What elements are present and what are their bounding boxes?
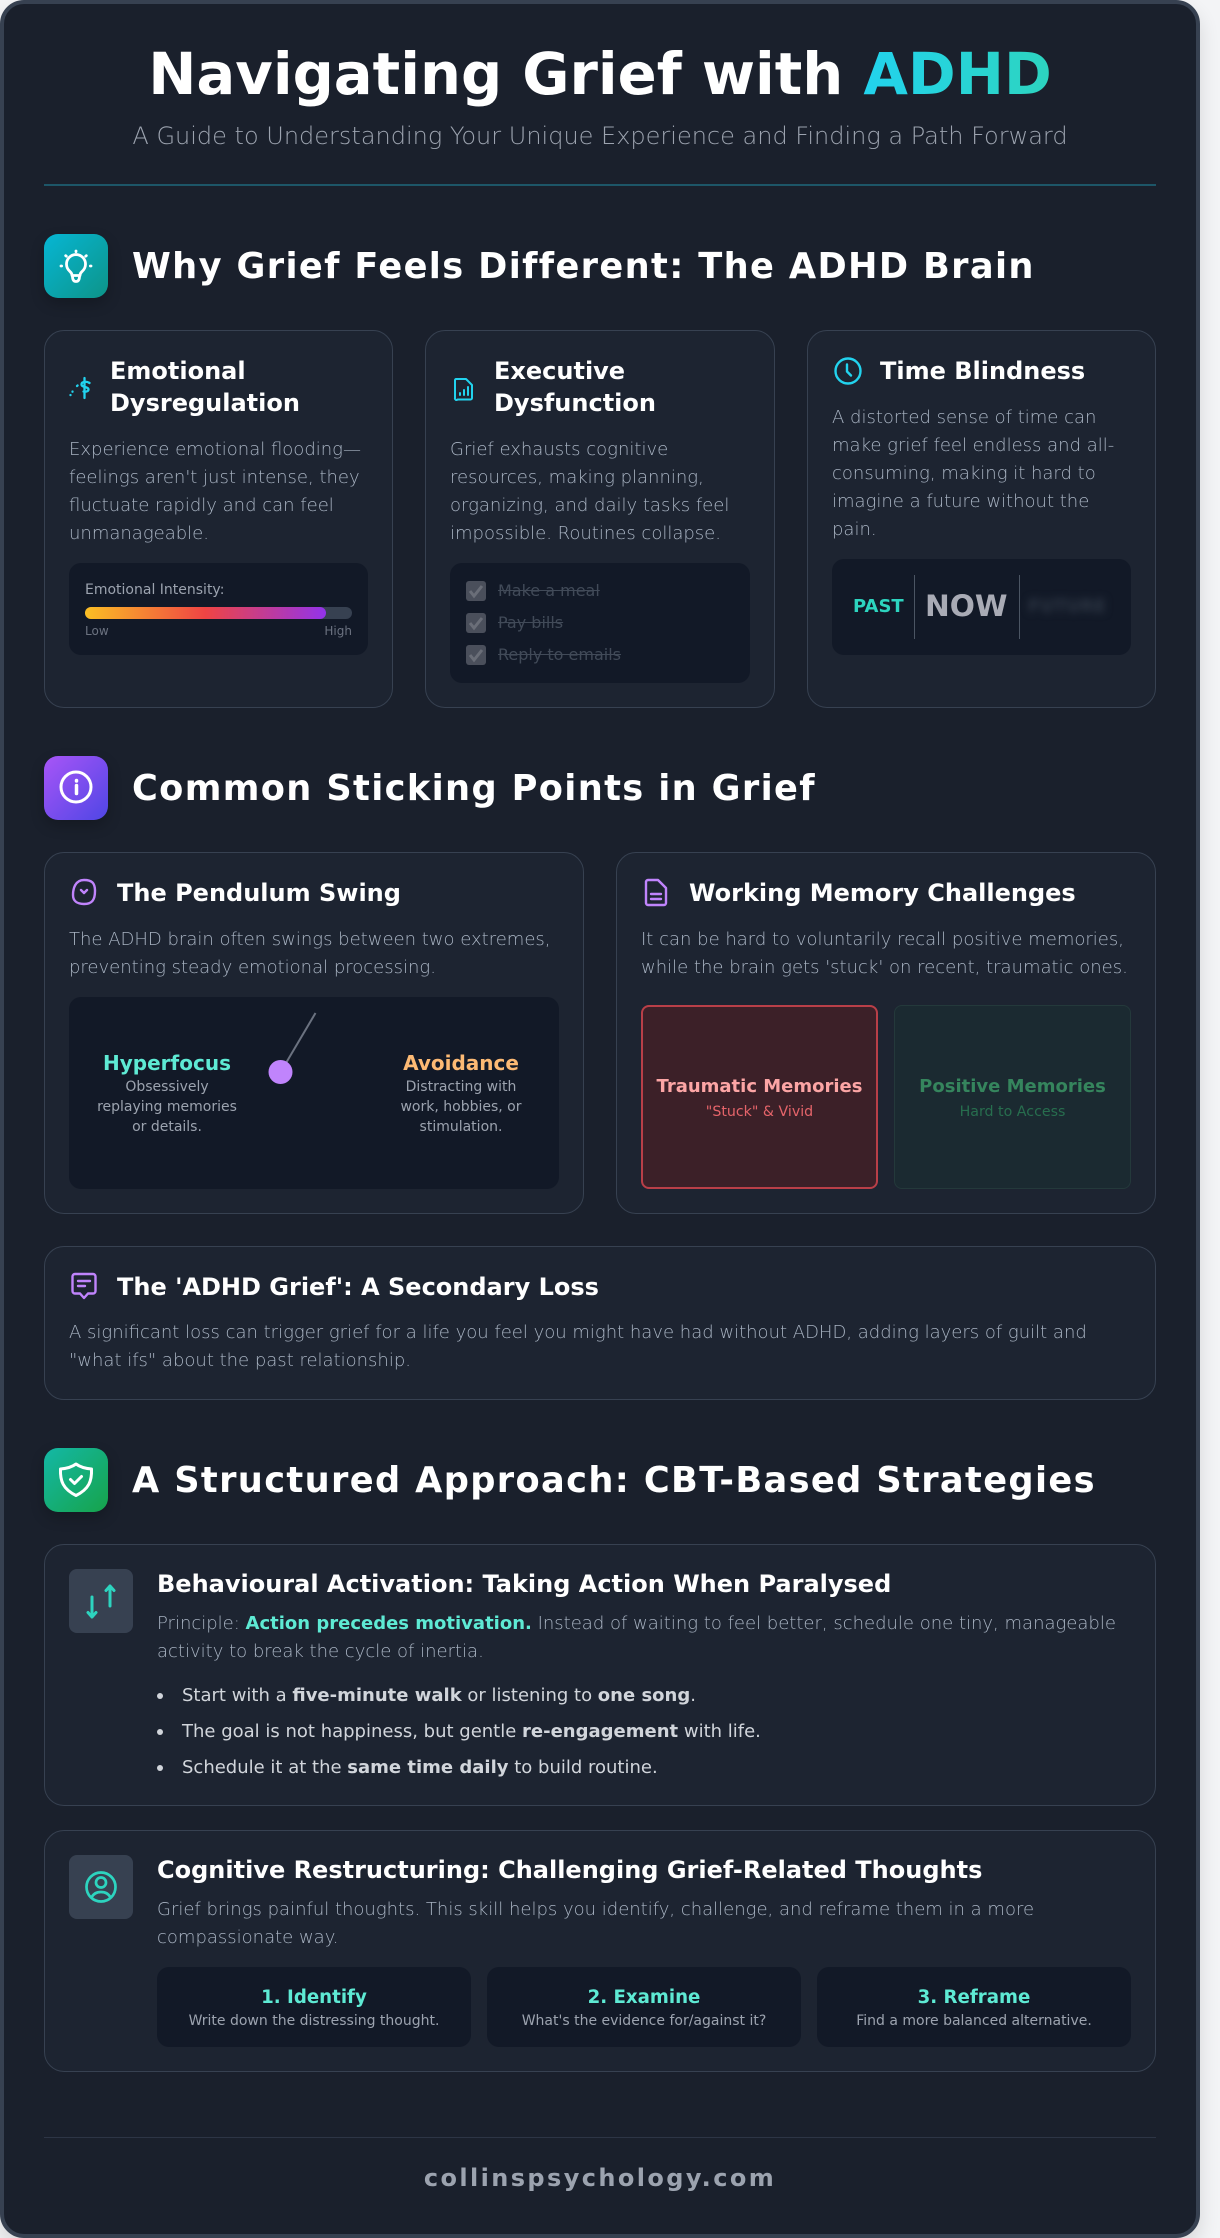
section icon: lightbulb — [44, 234, 108, 298]
card text — [69, 438, 361, 544]
card text: Experience emotional flooding— — [69, 438, 361, 460]
step text: Write down the distressing thought. — [189, 2013, 439, 2029]
section heading: sticking points: Common Sticking Points in Grief — [132, 768, 816, 809]
positive sub: Hard to Access — [960, 1104, 1065, 1120]
bullet 3 — [157, 1765, 163, 1771]
divider — [1019, 575, 1020, 639]
item 1: Start with a five-minute walk or listening to one song. — [182, 1685, 696, 1706]
panel: behavioural activation — [44, 1544, 1156, 1806]
icon: message — [71, 1272, 97, 1300]
checkbox 1 — [466, 581, 486, 601]
task 3: Reply to emails — [498, 645, 621, 664]
traumatic title: Traumatic Memories — [657, 1076, 862, 1097]
avoidance text: Distracting with — [406, 1079, 516, 1095]
card text — [450, 438, 729, 544]
step text: What's the evidence for/against it? — [522, 2013, 766, 2029]
icon: document — [644, 878, 668, 906]
card text: imagine a future without the — [832, 490, 1089, 512]
card text — [69, 1322, 1087, 1371]
step 1 — [157, 1967, 471, 2047]
now: NOW — [925, 589, 1008, 623]
card heading — [494, 357, 656, 417]
panel: pendulum swing — [44, 852, 584, 1214]
card text: pain. — [832, 518, 877, 540]
past: PAST — [853, 596, 904, 617]
card text: A significant loss can trigger grief for a life you feel you might have had without ADHD, adding layers of guilt and — [69, 1322, 1087, 1343]
step title: 1. Identify — [261, 1987, 367, 2008]
card heading: Emotional — [110, 357, 246, 385]
card text: activity to break the cycle of inertia. — [157, 1640, 484, 1662]
card text: Grief exhausts cognitive — [450, 438, 668, 460]
card heading: Working Memory Challenges — [689, 879, 1076, 907]
task 1: Make a meal — [498, 581, 600, 600]
card text: make grief feel endless and all- — [832, 434, 1114, 456]
panel: ADHD grief — [44, 1246, 1156, 1400]
step 3 — [817, 1967, 1131, 2047]
checkbox 3 — [466, 645, 486, 665]
icon: up down arrows — [86, 1584, 116, 1619]
card text: A distorted sense of time can — [832, 406, 1096, 428]
meter label: Emotional Intensity: — [85, 582, 224, 598]
card heading — [110, 357, 300, 417]
icon: pendulum — [72, 878, 96, 906]
card text: resources, making planning, — [450, 466, 704, 488]
bullet list — [157, 1685, 761, 1778]
item 3: Schedule it at the same time daily to build routine. — [182, 1757, 658, 1778]
footer divider — [44, 2137, 1156, 2138]
high label: High — [324, 624, 352, 638]
hyperfocus text: Obsessively — [125, 1079, 209, 1095]
avoidance text: work, hobbies, or — [400, 1099, 522, 1115]
card heading: Executive — [494, 357, 625, 385]
card text: compassionate way. — [157, 1927, 339, 1948]
avoidance title: Avoidance — [403, 1051, 519, 1075]
icon: document chart — [454, 378, 473, 401]
card text — [641, 928, 1128, 978]
pendulum arm and bob — [268, 1012, 316, 1084]
avoidance text — [400, 1079, 522, 1135]
step text: Find a more balanced alternative. — [856, 2013, 1092, 2029]
card heading: The 'ADHD Grief': A Secondary Loss — [117, 1272, 599, 1300]
subtitle: A Guide to Understanding Your Unique Experience and Finding a Path Forward — [132, 122, 1068, 150]
step title: 2. Examine — [588, 1987, 700, 2008]
icon box: user — [69, 1855, 133, 1919]
card text: preventing steady emotional processing. — [69, 956, 436, 978]
card text: Grief brings painful thoughts. This skill helps you identify, challenge, and reframe them in a more — [157, 1899, 1034, 1920]
card heading: Dysfunction — [494, 389, 656, 417]
card text: "what ifs" about the past relationship. — [69, 1350, 411, 1371]
card heading: Cognitive Restructuring: Challenging Grief-Related Thoughts — [157, 1856, 982, 1884]
low label: Low — [85, 624, 109, 638]
panel: time blindness — [807, 330, 1156, 708]
card text — [832, 406, 1114, 540]
card text — [69, 928, 551, 978]
icon: clock — [834, 357, 862, 385]
task 2: Pay bills — [498, 613, 563, 632]
section icon: info — [44, 756, 108, 820]
card heading: The Pendulum Swing — [117, 879, 401, 907]
bullet 2 — [157, 1729, 163, 1735]
panel: cognitive restructuring — [44, 1830, 1156, 2072]
step title: 3. Reframe — [918, 1987, 1030, 2008]
card text: feelings aren't just intense, they — [69, 466, 360, 488]
hyperfocus text — [97, 1079, 237, 1135]
card text — [157, 1899, 1034, 1948]
hyperfocus title: Hyperfocus — [103, 1051, 231, 1075]
intensity meter — [69, 563, 368, 655]
icon box: arrows — [69, 1569, 133, 1633]
card text: unmanageable. — [69, 522, 209, 544]
card text: It can be hard to voluntarily recall positive memories, — [641, 928, 1124, 950]
icon: emotion — [69, 376, 91, 400]
card text — [157, 1612, 1116, 1662]
traumatic memories box — [641, 1005, 878, 1189]
hyperfocus text: replaying memories — [97, 1099, 237, 1115]
section heading: ADHD brain: Why Grief Feels Different: The ADHD Brain — [132, 246, 1035, 287]
card text: while the brain gets 'stuck' on recent, traumatic ones. — [641, 956, 1128, 978]
positive title: Positive Memories — [919, 1076, 1106, 1097]
header divider — [44, 184, 1156, 186]
meter track — [85, 607, 352, 619]
item 2: The goal is not happiness, but gentle re-engagement with life. — [182, 1721, 761, 1742]
divider — [914, 575, 915, 639]
bullet 1 — [157, 1693, 163, 1699]
card text: fluctuate rapidly and can feel — [69, 494, 334, 516]
icon: user circle — [85, 1871, 117, 1903]
card text: The ADHD brain often swings between two extremes, — [69, 928, 551, 950]
checkbox 2 — [466, 613, 486, 633]
panel: emotional dysregulation — [44, 330, 393, 708]
section icon: shield — [44, 1448, 108, 1512]
avoidance text: stimulation. — [420, 1119, 502, 1135]
step 2 — [487, 1967, 801, 2047]
pendulum diagram — [69, 997, 559, 1189]
future (blurred): FUTURE — [1028, 597, 1106, 617]
panel: executive dysfunction — [425, 330, 775, 708]
traumatic sub: "Stuck" & Vivid — [706, 1104, 813, 1120]
card heading: Dysregulation — [110, 389, 300, 417]
card heading: Behavioural Activation: Taking Action When Paralysed — [157, 1570, 891, 1598]
title: Navigating Grief with ADHD — [148, 41, 1052, 108]
card text: Principle: Action precedes motivation. Instead of waiting to feel better, schedule one tiny, manageable — [157, 1612, 1116, 1634]
card text: organizing, and daily tasks feel — [450, 494, 729, 516]
timeline — [832, 559, 1131, 655]
section heading: strategies: A Structured Approach: CBT-Based Strategies — [132, 1460, 1096, 1501]
footer: collinspsychology.com — [424, 2164, 776, 2192]
hyperfocus text: or details. — [132, 1119, 202, 1135]
positive memories box — [894, 1005, 1131, 1189]
panel: working memory — [616, 852, 1156, 1214]
card heading: Time Blindness — [880, 357, 1085, 385]
card text: impossible. Routines collapse. — [450, 522, 721, 544]
checklist — [450, 563, 750, 683]
card text: consuming, making it hard to — [832, 462, 1096, 484]
